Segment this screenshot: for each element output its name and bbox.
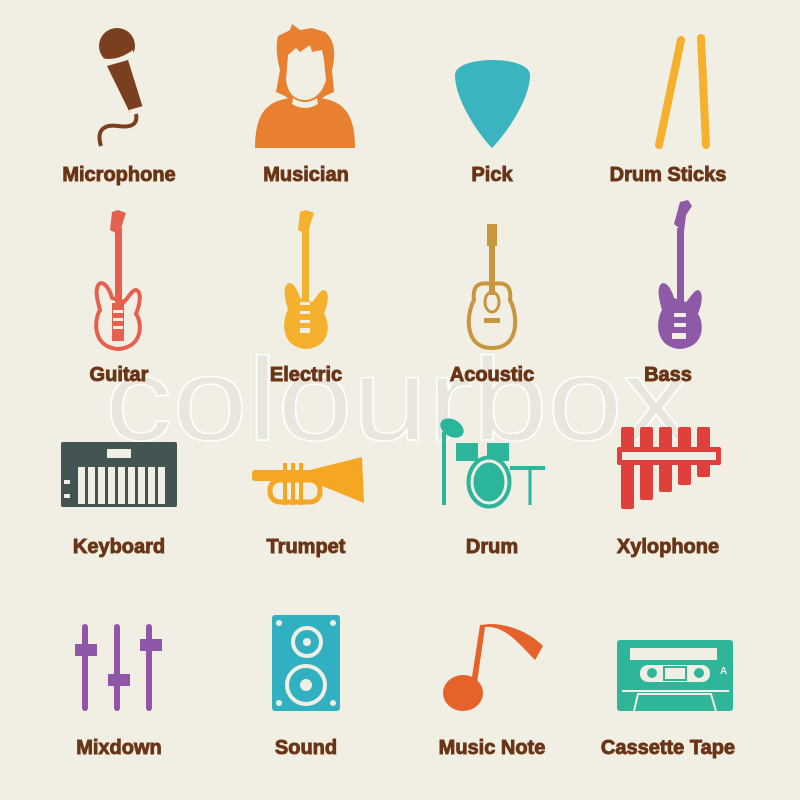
- label: row4: Mixdown: [76, 737, 162, 759]
- icon: musician: [255, 24, 355, 148]
- label: row1: Microphone: [62, 164, 176, 186]
- label: row1: Drum Sticks: [610, 164, 726, 186]
- icon: drum: [438, 415, 545, 508]
- label: row3: Drum: [466, 536, 518, 558]
- icon: sound: [272, 615, 340, 711]
- label: row2: [90, 364, 692, 386]
- icon: cassette: [617, 640, 733, 711]
- label: row3: Keyboard: [73, 536, 165, 558]
- icon: music note: [443, 624, 543, 711]
- label: row2: Bass: [644, 364, 692, 386]
- icon: keyboard: [61, 442, 177, 507]
- label: row2: Guitar: [90, 364, 149, 386]
- label: row3: Trumpet: [267, 536, 346, 558]
- icon: bass: [658, 200, 702, 349]
- icon: microphone: [99, 28, 144, 146]
- icon: guitar: [96, 210, 140, 349]
- label: row4: Sound: [275, 737, 337, 759]
- label: row4: Music Note: [439, 737, 545, 759]
- label: row1: [62, 164, 726, 186]
- watermark: colourbox: [105, 334, 690, 466]
- label: row1: Musician: [263, 164, 349, 186]
- icon: electric: [284, 210, 328, 349]
- label: row2: Acoustic: [450, 364, 534, 386]
- label: row1: Pick: [471, 164, 513, 186]
- label: row4: Cassette Tape: [601, 737, 735, 759]
- label: row4: [76, 737, 735, 759]
- icon: cassette: A: [720, 666, 727, 677]
- icon: drum sticks: [659, 38, 706, 145]
- icon: acoustic: [469, 224, 515, 348]
- icon: xylophone: [617, 427, 721, 509]
- icon: trumpet: [252, 457, 364, 505]
- label: row3: [73, 536, 719, 558]
- label: row3: Xylophone: [617, 536, 719, 558]
- label: row2: Electric: [270, 364, 342, 386]
- icon: pick: [455, 60, 530, 148]
- icon: mixdown: [75, 624, 162, 711]
